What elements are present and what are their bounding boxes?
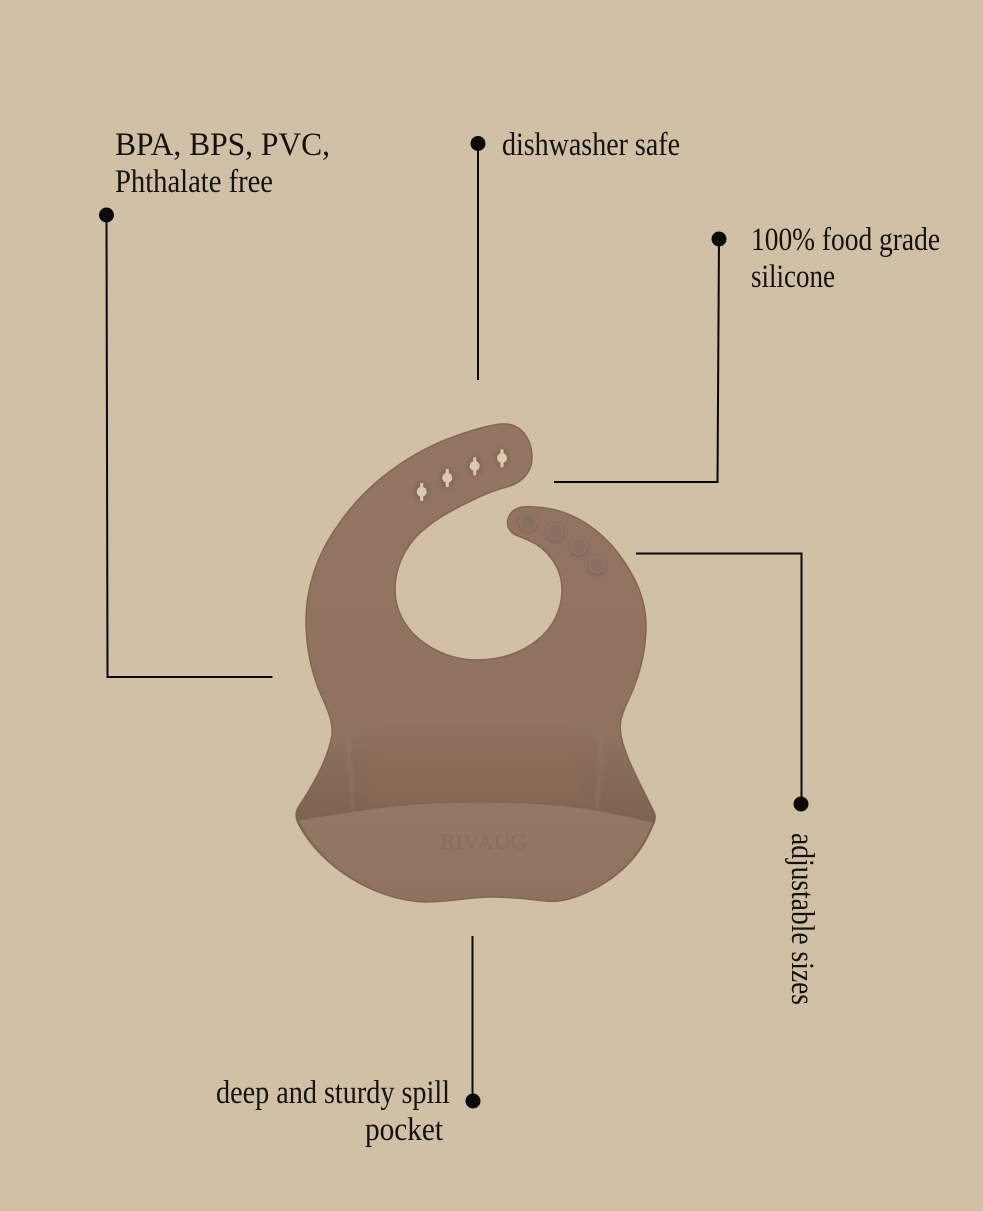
text: food grade silicone: 100% food grade	[751, 222, 940, 258]
text: food grade silicone	[751, 222, 940, 295]
text: spill pocket: pocket	[365, 1112, 443, 1148]
text: BPA free: Phthalate free	[115, 164, 273, 200]
callout: BPA, BPS, PVC, Phthalate free	[99, 127, 330, 677]
text: dishwasher safe: dishwasher safe	[502, 127, 680, 163]
illustration: silicone bib	[296, 424, 656, 902]
strap holes	[414, 448, 510, 502]
text: food grade silicone: silicone	[751, 259, 835, 295]
hole openings	[417, 449, 507, 501]
button caps	[520, 513, 605, 573]
leader line: dishwasher safe	[470, 136, 486, 380]
spill pocket	[298, 802, 653, 902]
text: spill pocket	[216, 1075, 450, 1148]
shading: pocket interior	[296, 768, 655, 825]
button shadows	[518, 512, 606, 576]
callout: adjustable sizes	[636, 554, 820, 1005]
callout: 100% food grade silicone	[554, 222, 940, 482]
brand mark: RIVAUG	[440, 829, 527, 854]
callout: spill pocket	[216, 936, 480, 1148]
text: adjustable sizes: adjustable sizes	[784, 833, 820, 1005]
strap buttons	[518, 512, 606, 576]
leader line: silicone	[554, 232, 726, 482]
leader line: BPA free	[99, 208, 272, 677]
leader line: spill pocket	[466, 936, 480, 1108]
callout: dishwasher safe	[470, 127, 680, 380]
bib body	[296, 424, 655, 902]
hole halos	[414, 448, 510, 502]
text: BPA free	[115, 127, 330, 200]
leader line: adjustable sizes	[636, 554, 808, 812]
text: spill pocket: deep and sturdy spill	[216, 1075, 450, 1111]
text: BPA free: BPA, BPS, PVC,	[115, 127, 330, 163]
